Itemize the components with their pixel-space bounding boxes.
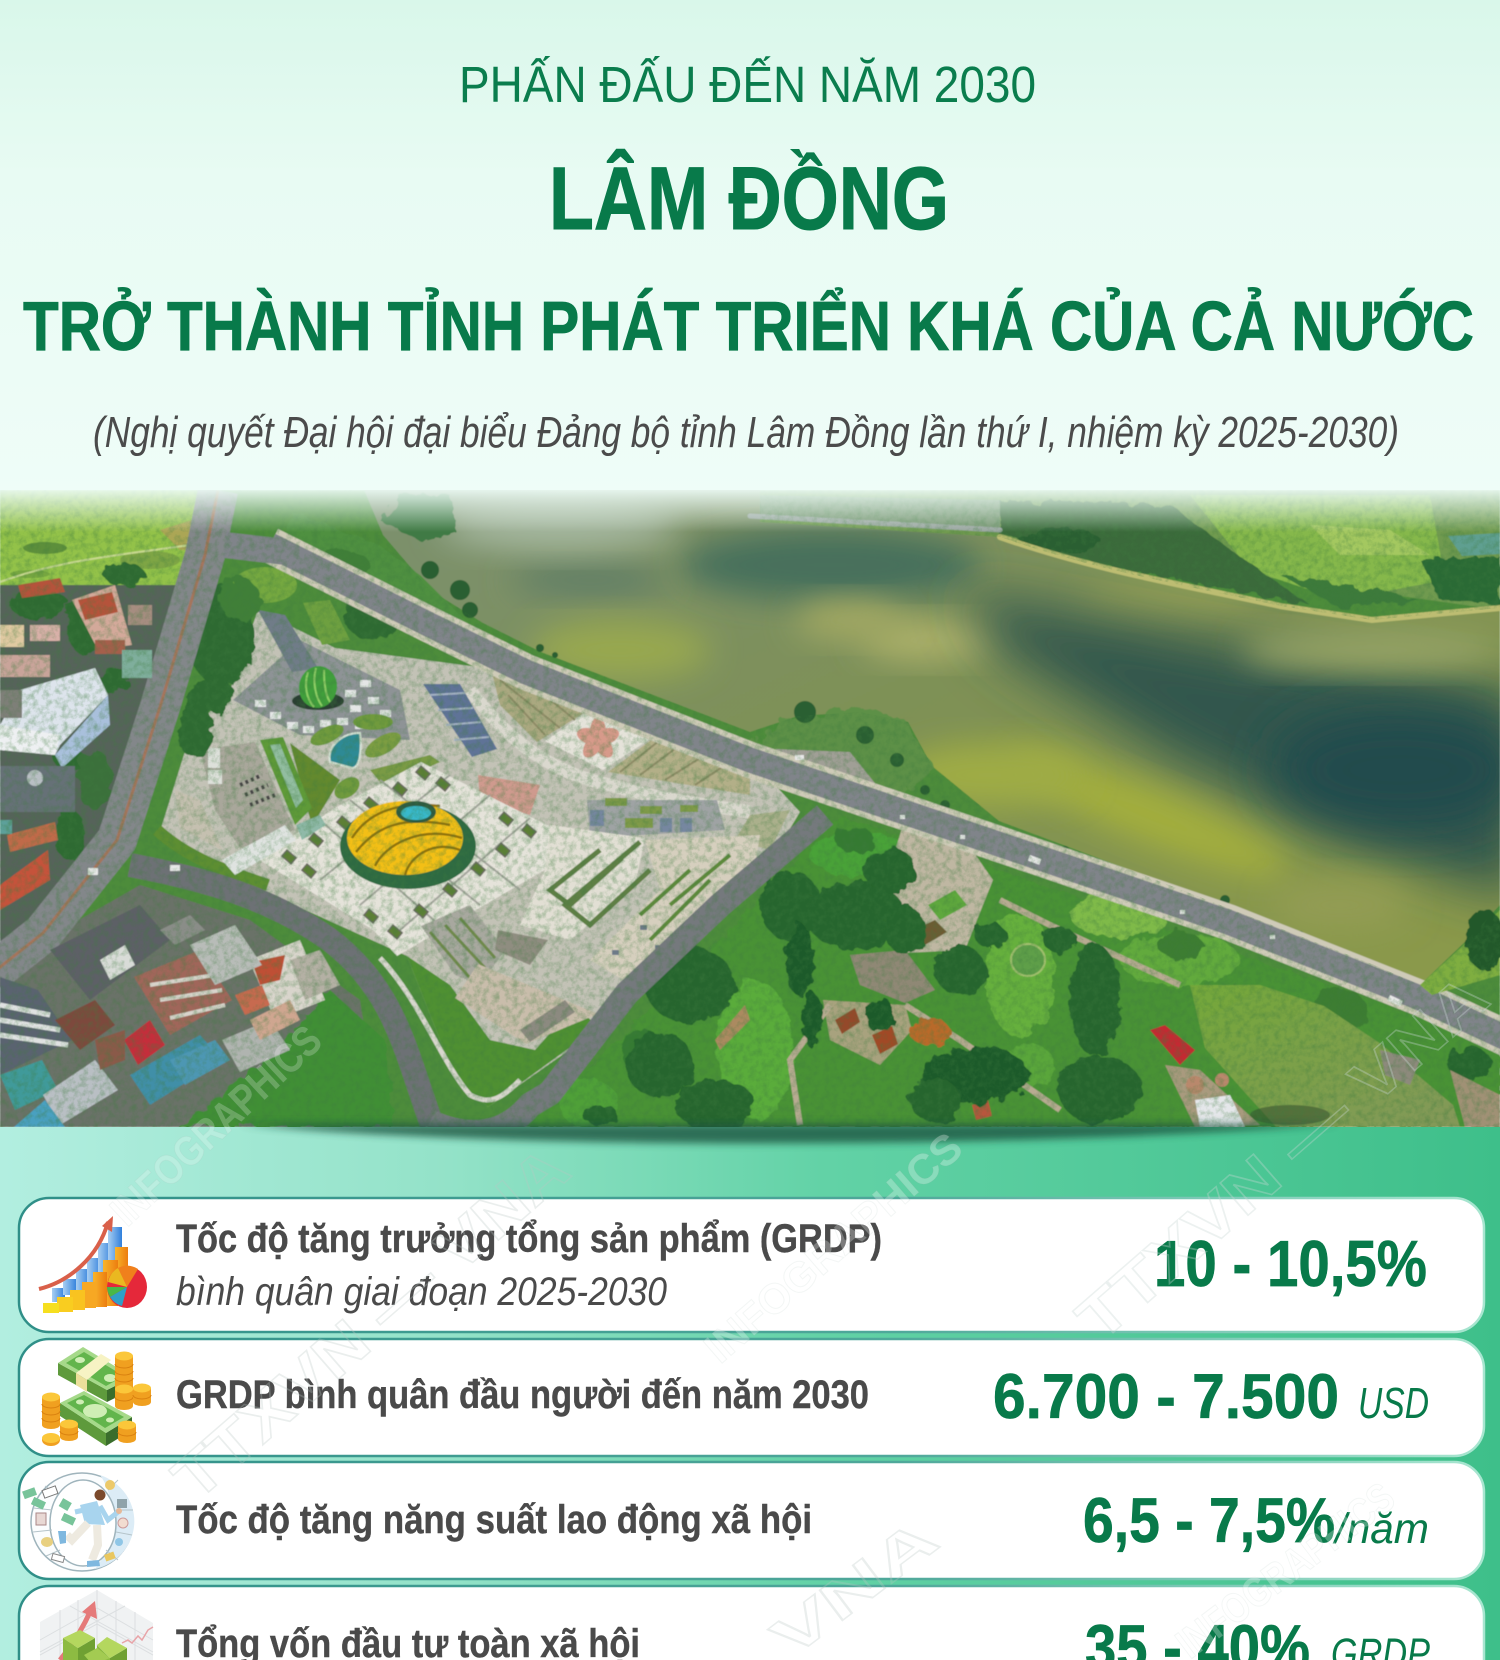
top-left golf field <box>0 492 196 586</box>
white platform <box>258 762 555 956</box>
row of small courts <box>587 798 790 850</box>
label: labour productivity: Tốc độ tăng năng suất lao động xã hội <box>176 1498 812 1542</box>
header background <box>0 0 1500 500</box>
land base <box>0 490 1500 1127</box>
green slope <box>177 990 395 1127</box>
panel: card 2 GRDP per capita <box>19 1339 1484 1456</box>
west city buildings <box>0 578 340 1127</box>
value: growth rate: 10 - 10,5% <box>1154 1227 1427 1300</box>
south-east shore corner <box>1380 910 1500 1127</box>
right stepped structure <box>421 825 760 1044</box>
main title: LÂM ĐỒNG <box>549 148 949 248</box>
aerial photo of Da Lat and Xuan Huong lake <box>0 480 1500 1132</box>
curved promenade <box>470 690 750 812</box>
parking by peninsula <box>776 748 875 784</box>
village strip <box>1150 1025 1260 1127</box>
unit: per year: /năm <box>1332 1505 1429 1553</box>
label: GRDP growth: Tốc độ tăng trưởng tổng sản phẩm (GRDP) <box>176 1217 882 1261</box>
lower panel background <box>0 1127 1500 1660</box>
east park paving <box>715 818 1180 1125</box>
leaf pavilion <box>329 733 361 768</box>
pond shadow <box>1250 1105 1330 1125</box>
photo bottom shadow <box>240 1124 1340 1144</box>
plaza trees <box>10 549 400 861</box>
panel: card 1 GRDP growth <box>19 1198 1484 1332</box>
value: USD range: 6.700 - 7.500 <box>993 1362 1339 1432</box>
northern shore land <box>740 490 1500 610</box>
top haze <box>0 486 1500 532</box>
solar roof building <box>423 684 540 815</box>
watermarks: TTXVN — VNA <box>160 1133 583 1514</box>
watermarks: INFOGRAPHICS <box>101 1016 331 1235</box>
panel: card 4 total social investment <box>19 1586 1484 1660</box>
roads <box>0 490 1500 1132</box>
watermelon court grid <box>233 610 410 740</box>
title block <box>23 55 1474 457</box>
watermarks: INFOGRAPHICS <box>695 1123 971 1372</box>
value: productivity growth: 6,5 - 7,5% <box>1083 1486 1335 1556</box>
west city ground <box>0 584 176 942</box>
lake banks <box>750 516 1500 620</box>
parking lot <box>200 742 326 875</box>
pond <box>1190 985 1460 1127</box>
south bank tree line <box>421 561 1304 939</box>
plaza lawns <box>157 567 598 1107</box>
peninsula <box>380 493 934 792</box>
watermarks: TTXVN — VNA <box>1064 961 1500 1355</box>
watermelon dome <box>292 663 344 711</box>
icon: growth chart with pie <box>39 1216 147 1313</box>
speckled photo texture <box>0 490 1500 1127</box>
watermarks <box>101 961 1500 1660</box>
cars <box>88 755 1403 1006</box>
yellow dome <box>340 801 476 889</box>
lake <box>360 480 1500 985</box>
kicker: PHẤN ĐẤU ĐẾN NĂM 2030 <box>459 55 1036 113</box>
sublabel: period: bình quân giai đoạn 2025-2030 <box>176 1270 667 1314</box>
unit: USD: USD <box>1358 1379 1429 1428</box>
icon: money and coins <box>42 1347 151 1446</box>
fan-shaped checker squares <box>491 669 750 795</box>
icon: green bill stacks on grid <box>40 1590 153 1660</box>
panel: card 3 labour productivity <box>19 1462 1484 1579</box>
planter squares <box>282 766 536 939</box>
platform grid <box>320 775 530 930</box>
icon: man running in wheel <box>22 1473 134 1571</box>
orange tree <box>910 1018 950 1046</box>
plaza base <box>158 610 800 1107</box>
east parkland lawns <box>520 815 1500 1129</box>
tree clusters <box>582 828 1492 1131</box>
label: GRDP per capita: GRDP bình quân đầu người đến năm 2030 <box>176 1373 869 1417</box>
